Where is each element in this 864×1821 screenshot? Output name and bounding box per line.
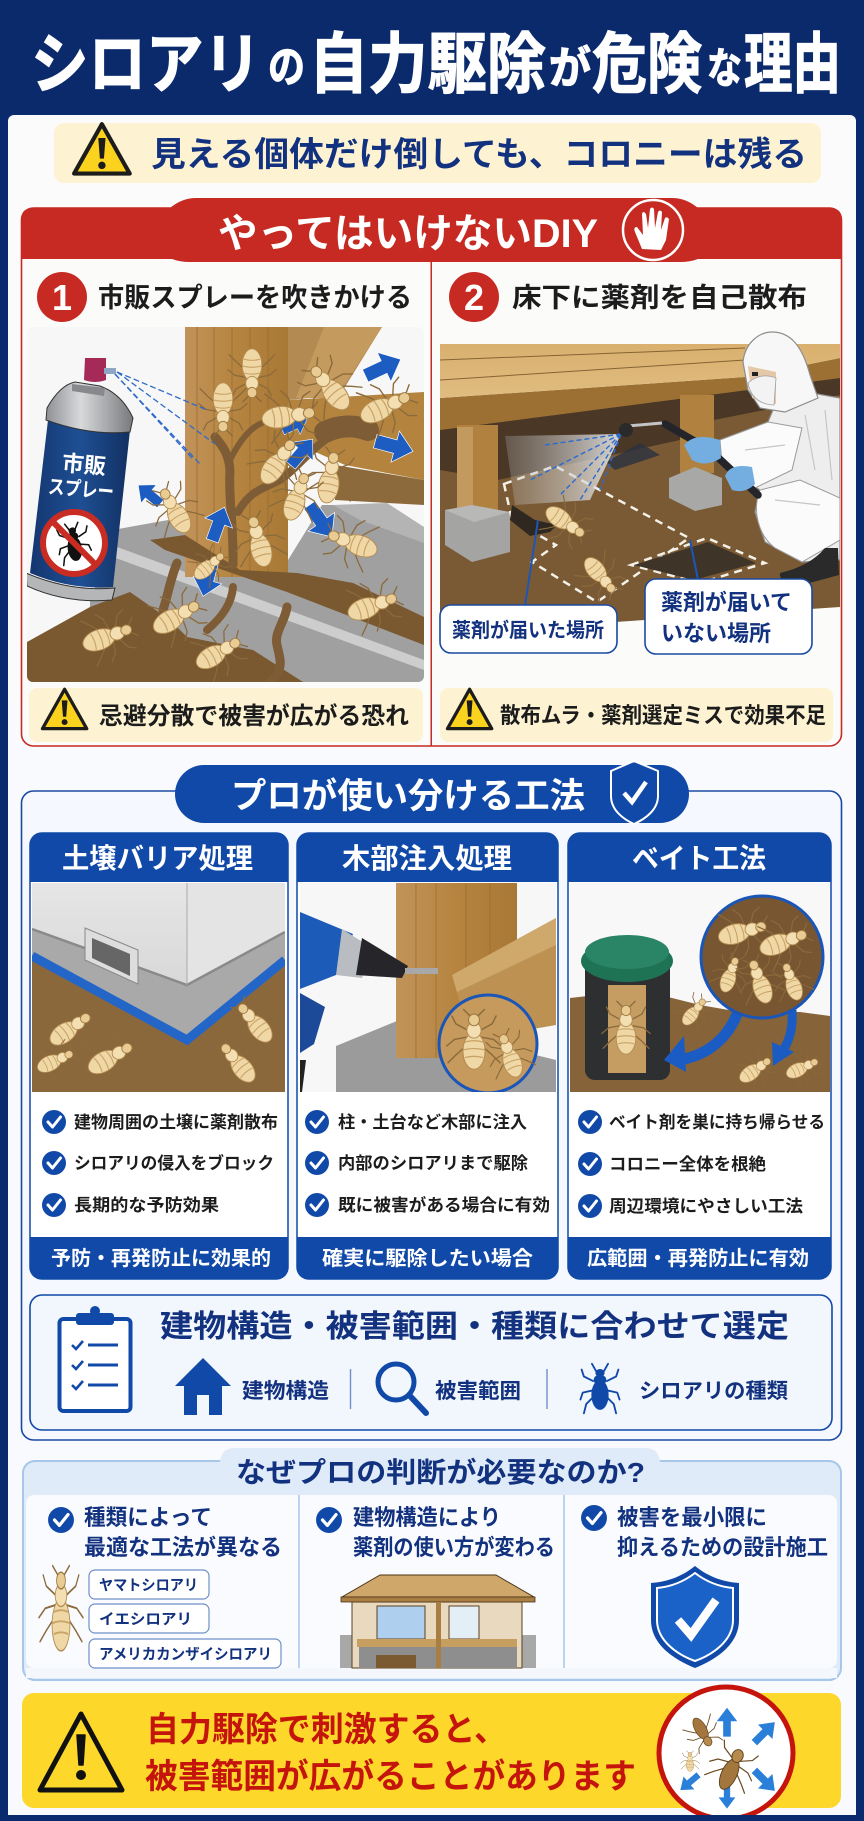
column: minimize damage	[581, 1505, 828, 1668]
inset: nest	[701, 896, 823, 1018]
icon: shield	[651, 1566, 739, 1668]
step 1 heading: 市販スプレーを吹きかける	[98, 283, 412, 313]
footer band	[568, 1237, 831, 1279]
icon: warning	[40, 1714, 122, 1790]
beam	[288, 327, 382, 400]
illustration: bait station	[570, 883, 830, 1095]
tag	[89, 1604, 209, 1633]
concrete	[27, 505, 424, 682]
panel: why a professional	[23, 1448, 841, 1680]
column: species: 最適な工法が異なる	[84, 1535, 282, 1560]
footer band	[30, 1237, 288, 1279]
right post	[680, 395, 714, 473]
label: damage: 被害範囲	[435, 1380, 521, 1403]
icon: insect	[580, 1364, 620, 1413]
illustration: under-floor spraying	[440, 332, 840, 622]
title: シロアリ	[31, 27, 261, 101]
column: species: 種類によって	[84, 1505, 212, 1530]
step 1 heading	[37, 272, 412, 322]
mud trail	[150, 423, 424, 682]
heading tab	[220, 1448, 660, 1495]
tag: ヤマトシロアリ	[99, 1577, 198, 1594]
column: minimize damage: 抑えるための設計施工	[617, 1535, 828, 1560]
termites	[75, 347, 424, 686]
column: species	[39, 1505, 282, 1668]
callout leader lines	[525, 520, 698, 606]
icon: no bugs	[43, 512, 105, 574]
illustration: drill	[300, 883, 556, 1093]
red header	[21, 198, 842, 262]
list: シロアリの侵入をブロック	[74, 1153, 274, 1173]
white content panel	[8, 115, 856, 821]
right navy edge	[856, 115, 864, 1815]
banner text: 見える個体だけ倒しても、コロニーは残る	[151, 136, 807, 174]
post	[185, 327, 288, 577]
icon: shield check	[611, 761, 658, 824]
left post	[457, 425, 498, 515]
right block	[669, 467, 722, 511]
title	[31, 27, 841, 101]
step 1 heading: 1	[52, 277, 72, 318]
step 2 heading: 床下に薬剤を自己散布	[512, 283, 807, 313]
bottom warning band	[22, 1687, 841, 1819]
title: が	[549, 44, 591, 93]
worker arm	[720, 422, 802, 488]
dark pits	[634, 542, 756, 580]
step 2 heading: 2	[464, 277, 484, 318]
selection heading: 建物構造・被害範囲・種類に合わせて選定	[160, 1309, 789, 1344]
termites	[538, 494, 593, 549]
column: structure: 薬剤の使い方が変わる	[353, 1535, 555, 1560]
list: 建物周囲の土壌に薬剤散布	[74, 1113, 278, 1132]
card: bait: 広範囲・再発防止に有効	[587, 1247, 809, 1270]
zones	[504, 466, 765, 602]
callout: reached	[440, 605, 617, 653]
callout: not reached: いない場所	[661, 621, 771, 646]
list: ベイト剤を巣に持ち帰らせる	[609, 1112, 825, 1132]
column: structure	[316, 1505, 555, 1668]
can label: 市販	[61, 450, 107, 479]
icon: termite	[39, 1566, 83, 1651]
spray can: スプレー	[47, 475, 115, 504]
list: 長期的な予防効果	[74, 1196, 219, 1215]
callout: not reached: 薬剤が届いて	[661, 590, 792, 615]
selection box	[30, 1295, 832, 1430]
label: species: シロアリの種類	[639, 1380, 788, 1403]
tag	[89, 1639, 281, 1668]
card: soil barrier: 土壌バリア処理	[62, 843, 253, 874]
card: soil barrier	[30, 833, 288, 1279]
title: の	[268, 43, 305, 92]
warning text	[145, 1711, 636, 1796]
card: soil barrier: 予防・再発防止に効果的	[51, 1247, 271, 1270]
title: な	[707, 45, 742, 92]
bottom navy strip	[0, 1815, 864, 1821]
warning banner	[54, 123, 821, 183]
spray mist	[115, 372, 215, 465]
soil	[27, 592, 303, 682]
card: bait: ベイト工法	[632, 843, 766, 874]
dark underfloor shadow	[440, 378, 840, 480]
column: structure: 建物構造により	[353, 1505, 501, 1530]
title: 自力駆除	[309, 27, 546, 101]
footer band	[297, 1237, 558, 1279]
label: structure: 建物構造	[242, 1380, 329, 1403]
left block	[445, 507, 510, 562]
list: 周辺環境にやさしい工法	[609, 1197, 803, 1216]
soil	[440, 370, 840, 622]
warning strip 1: 忌避分散で被害が広がる恐れ	[99, 702, 409, 730]
icon: warning triangle	[74, 124, 130, 174]
spray can	[26, 358, 133, 601]
list: 柱・土台など木部に注入	[338, 1112, 527, 1132]
illustration: soil barrier	[30, 883, 288, 1096]
card: wood injection	[297, 833, 558, 1279]
tag: イエシロアリ	[99, 1611, 192, 1628]
list	[578, 1110, 825, 1218]
section heading pill	[175, 761, 689, 824]
list: 内部のシロアリまで駆除	[338, 1154, 528, 1173]
step 2 heading	[449, 272, 807, 322]
inset: termites in wood	[439, 995, 538, 1093]
tag: アメリカカンザイシロアリ	[99, 1646, 272, 1663]
list	[42, 1110, 278, 1217]
worker hood	[743, 332, 818, 412]
worker	[619, 332, 840, 585]
panel: DIY	[21, 198, 842, 746]
card: wood injection: 木部注入処理	[342, 843, 512, 874]
title: 危険	[592, 27, 702, 101]
icon: house	[175, 1358, 231, 1415]
warning text: 自力駆除で刺激すると、	[146, 1711, 507, 1749]
section heading pill: プロが使い分ける工法	[231, 777, 585, 816]
warning strip 2	[440, 688, 833, 742]
card: bait	[568, 833, 831, 1279]
deck top	[440, 344, 840, 398]
icon: clipboard	[60, 1306, 130, 1411]
column: minimize damage: 被害を最小限に	[617, 1505, 767, 1530]
list: 既に被害がある場合に有効	[338, 1195, 550, 1215]
spray cone	[505, 434, 621, 505]
column divider	[430, 259, 432, 746]
icon: scattering termites	[659, 1687, 793, 1819]
boot	[780, 548, 839, 585]
list: コロニー全体を根絶	[609, 1155, 766, 1174]
warning strip 2: 散布ムラ・薬剤選定ミスで効果不足	[500, 703, 826, 728]
callout: reached: 薬剤が届いた場所	[452, 618, 604, 642]
tag	[89, 1570, 209, 1599]
callout: not reached	[645, 579, 812, 654]
panel: professional methods	[22, 761, 842, 1440]
icon: magnifier	[378, 1364, 426, 1413]
gloves and lance	[665, 424, 758, 495]
icon: stop hand	[623, 200, 683, 260]
worker leg	[756, 480, 840, 562]
list	[305, 1110, 550, 1217]
warning strip 1	[29, 688, 423, 742]
arrows	[131, 345, 417, 600]
white content panel lower	[8, 700, 856, 1815]
header text: やってはいけないDIY	[218, 212, 598, 256]
card: wood injection: 確実に駆除したい場合	[322, 1247, 533, 1270]
heading: なぜプロの判断が必要なのか?	[236, 1456, 645, 1488]
illustration: house	[340, 1575, 536, 1668]
illustration: spray on termites	[26, 327, 424, 686]
deck fascia	[440, 358, 840, 430]
warning text: 被害範囲が広がることがあります	[145, 1757, 636, 1796]
left navy edge	[0, 115, 8, 1815]
